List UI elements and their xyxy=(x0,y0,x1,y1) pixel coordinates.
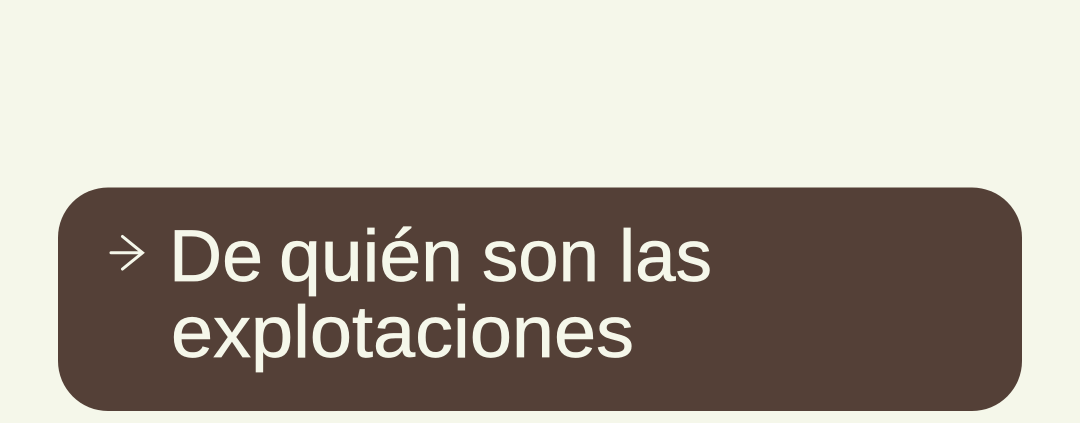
heading: title text xyxy=(169,216,712,373)
heading: title text: De xyxy=(169,216,263,297)
panel: heading banner xyxy=(58,188,1022,411)
heading: title text: son xyxy=(482,216,599,297)
heading: title text: quién xyxy=(279,216,463,297)
heading: title text: las xyxy=(619,216,712,297)
heading: title text: explotaciones xyxy=(171,292,634,373)
icon: arrow xyxy=(111,236,142,269)
